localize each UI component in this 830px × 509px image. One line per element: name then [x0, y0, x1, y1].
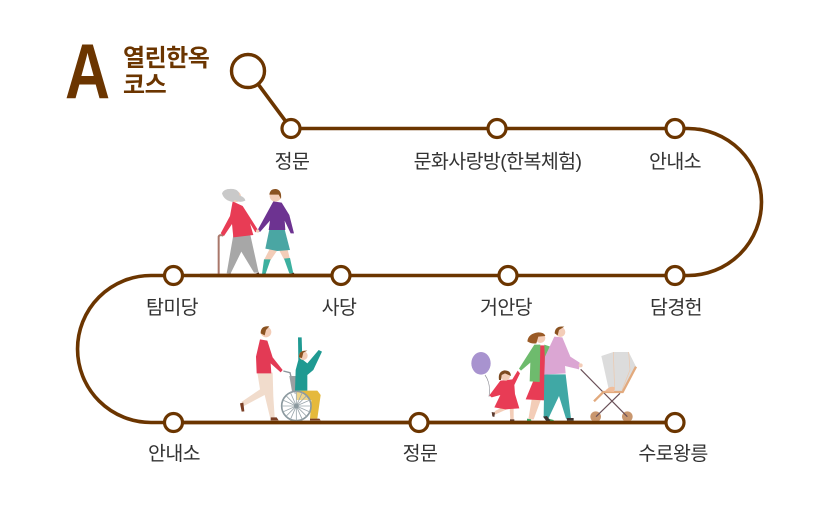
route line overlay under the figures [184, 276, 666, 422]
stop: 수로왕릉: 수로왕릉 [638, 443, 708, 465]
mother [528, 399, 541, 419]
start marker [232, 54, 264, 88]
stop: 안내소 (lower) [148, 414, 200, 465]
balloon [471, 352, 491, 375]
stop: 안내소 (lower): 안내소 [148, 443, 200, 465]
illustration: person pushing wheelchair [240, 326, 322, 421]
stop: 문화사랑방(한복체험) [414, 120, 582, 173]
route line [78, 84, 761, 422]
illustration: stroller [581, 352, 636, 422]
stop: 안내소 (upper): 안내소 [649, 151, 701, 173]
stop: 정문 (start): 정문 [275, 151, 309, 173]
stop: 정문 (lower) [403, 414, 437, 465]
stop: 수로왕릉 [638, 414, 708, 465]
stop: 담경헌: 담경헌 [650, 297, 702, 319]
stop: 탐미당 [146, 266, 199, 319]
stop: 거안당 [480, 266, 533, 319]
stop: 안내소 (upper) [649, 120, 701, 173]
course letter A: A [65, 27, 110, 115]
course title [123, 45, 210, 99]
stop: 사당: 사당 [322, 297, 357, 319]
illustration: family with balloon and stroller [471, 326, 583, 423]
stop: 담경헌 [650, 266, 702, 319]
stop: 문화사랑방(한복체험): 문화사랑방(한복체험) [414, 151, 582, 173]
illustration: elderly woman and boy walking [219, 189, 295, 277]
course title: 코스 [123, 72, 167, 99]
stop: 거안당: 거안당 [480, 297, 533, 319]
stop: 사당 [322, 266, 357, 319]
father [544, 374, 571, 419]
stop: 탐미당: 탐미당 [146, 297, 199, 319]
stop: 정문 (lower): 정문 [403, 443, 437, 465]
course title: 열린한옥 [123, 45, 210, 72]
stop: 정문 (start) [275, 120, 309, 173]
